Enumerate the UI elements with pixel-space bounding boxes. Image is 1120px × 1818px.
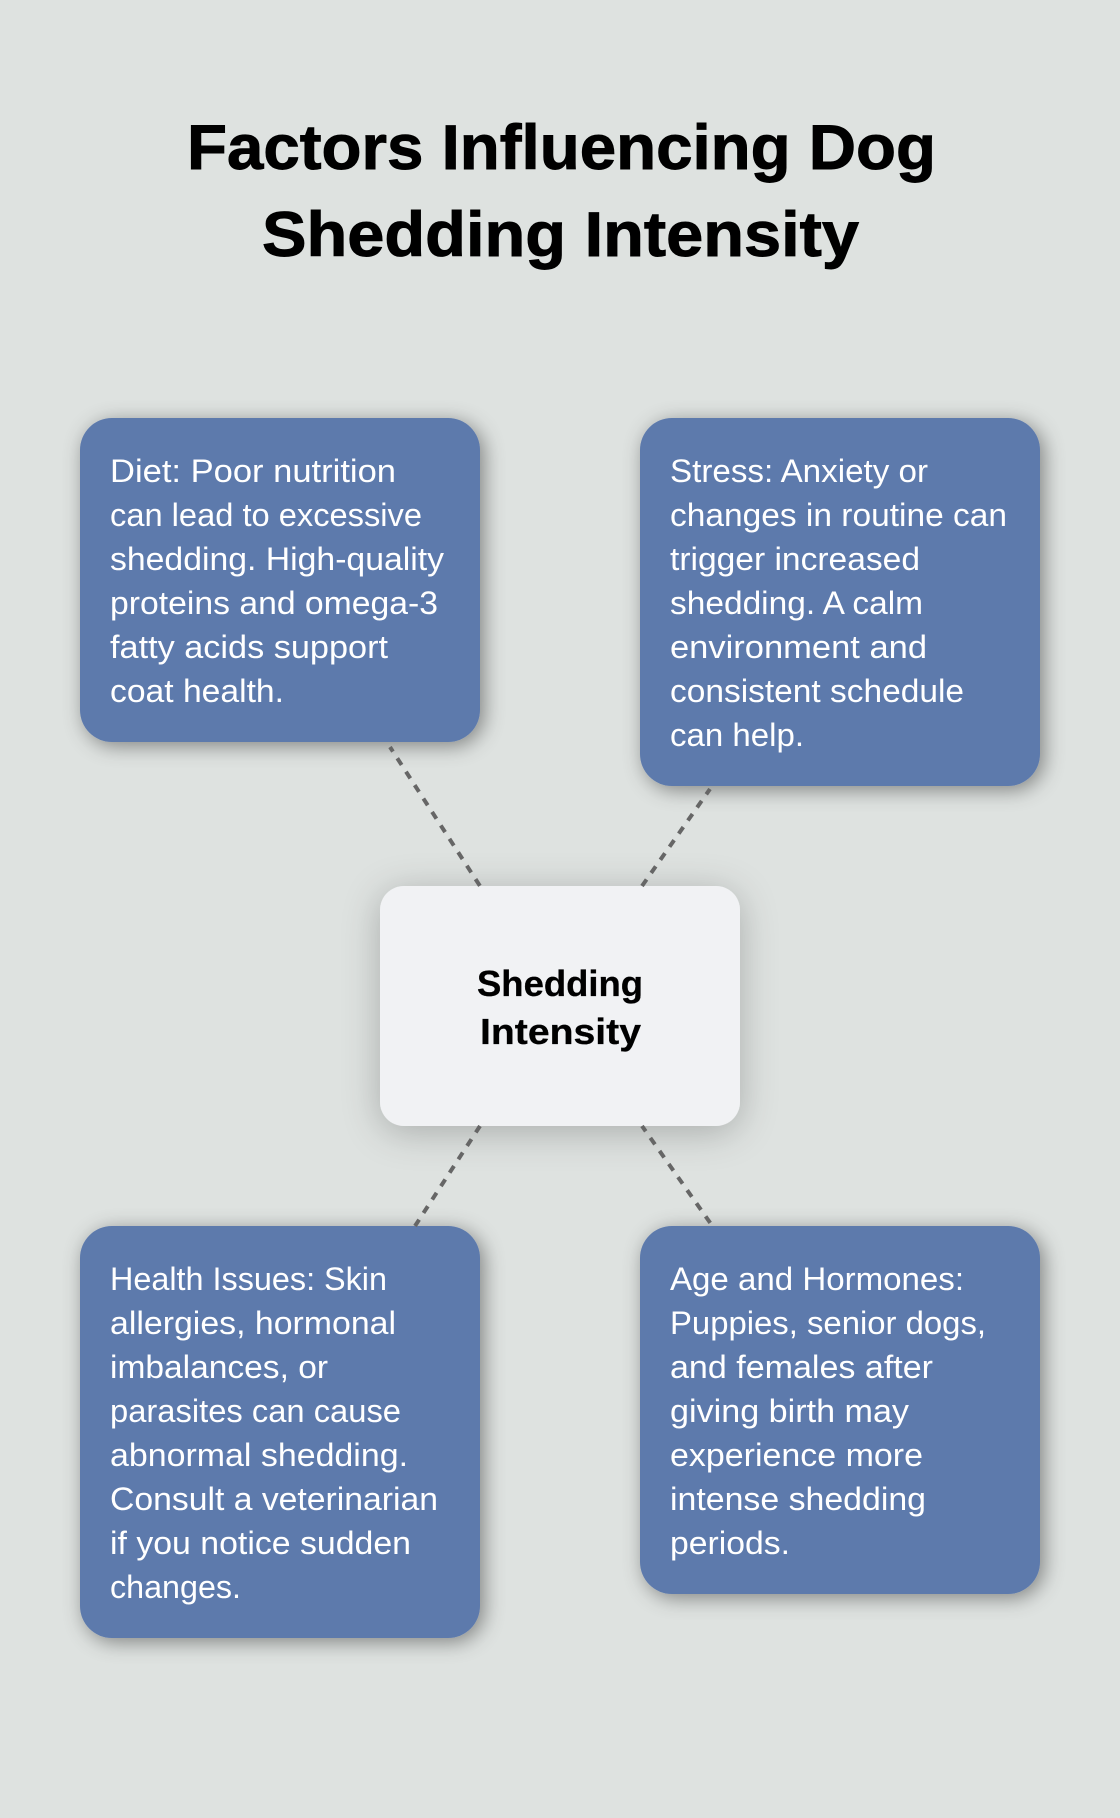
panel: age and hormones: periods. [670,1525,790,1561]
panel: diet: coat health. [110,673,284,709]
title [187,113,936,270]
panel: age and hormones: intense shedding [670,1481,926,1517]
panel: stress [640,418,1040,786]
panel: stress: trigger increased [670,541,920,577]
panel: diet: can lead to excessive [110,497,422,533]
panel: stress: Stress: Anxiety or [670,453,928,489]
panel: diet: proteins and omega-3 [110,585,438,621]
panel: health issues: allergies, hormonal [110,1305,396,1341]
connector: diet to center [390,747,480,886]
panel: age and hormones [640,1226,1040,1594]
panel: age and hormones: giving birth may [670,1393,909,1429]
panel: center node: Shedding [477,963,643,1004]
panel: stress: changes in routine can [670,497,1007,533]
panel: health issues: if you notice sudden [110,1525,411,1561]
panel: stress: can help. [670,717,804,753]
panel: health issues: changes. [110,1569,241,1605]
panel: age and hormones: Puppies, senior dogs, [670,1305,986,1341]
panel: health issues: abnormal shedding. [110,1437,408,1473]
panel: health issues: parasites can cause [110,1393,401,1429]
panel: health issues: Consult a veterinarian [110,1481,438,1517]
panel: center node: Intensity [480,1011,641,1052]
panel: health issues [80,1226,480,1638]
panel: stress: environment and [670,629,927,665]
panel: age and hormones: Age and Hormones: [670,1261,964,1297]
panel: diet: Diet: Poor nutrition [110,453,396,489]
connector: health to center [415,1126,480,1226]
panel: health issues: imbalances, or [110,1349,328,1385]
connector: stress to center [642,789,710,886]
panel: diet [80,418,480,742]
panel: stress: consistent schedule [670,673,964,709]
title: Shedding Intensity [262,200,859,270]
connector: age to center [642,1126,711,1224]
panel: diet: shedding. High-quality [110,541,444,577]
panel: health issues: Health Issues: Skin [110,1261,387,1297]
panel: diet: fatty acids support [110,629,388,665]
panel: age and hormones: and females after [670,1349,933,1385]
panel: center node [380,886,740,1126]
title: Factors Influencing Dog [187,113,936,183]
panel: age and hormones: experience more [670,1437,923,1473]
panel: stress: shedding. A calm [670,585,923,621]
